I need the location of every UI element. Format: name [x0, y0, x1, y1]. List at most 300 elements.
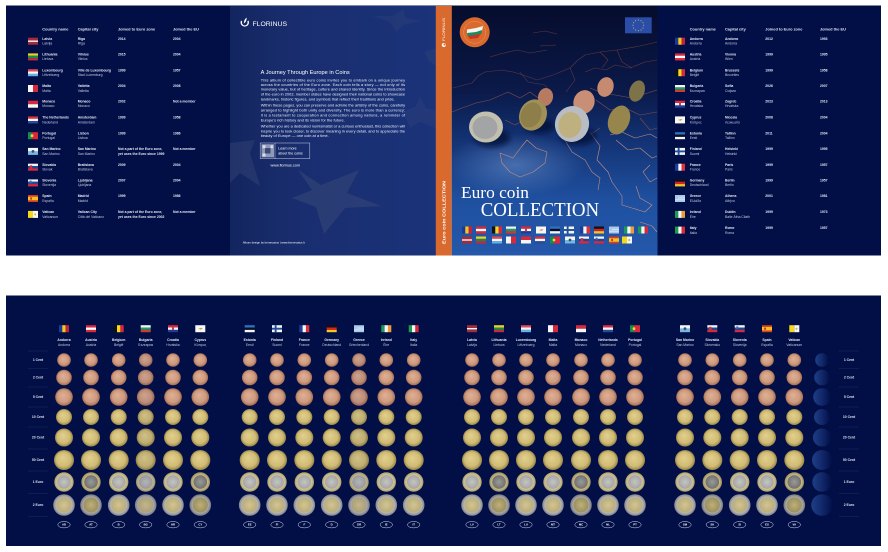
- row: Cyprus: Cyprus: [690, 116, 701, 120]
- row: Malta: [28, 84, 181, 93]
- row: France: Paris: [725, 168, 733, 172]
- row: Croatia: [675, 100, 828, 108]
- column: Italy: [403, 325, 425, 528]
- row: Estonia: Tallinn: [725, 136, 735, 140]
- column: Malta: Malta: [549, 338, 557, 342]
- coin: copper medium: [570, 87, 598, 117]
- row: Ireland: [675, 210, 828, 219]
- QR code box: Learn more: [278, 147, 297, 151]
- row: Cyprus: 2004: [820, 116, 828, 120]
- column: San Marino: SM: [683, 523, 688, 527]
- table header: Country name: [42, 26, 69, 31]
- row: Luxembourg: Luxembourg: [42, 68, 63, 72]
- column: Cyprus: Κύπρος: [194, 343, 207, 347]
- row: Cyprus: Λευκωσία: [725, 120, 740, 124]
- column: Malta: MT: [551, 523, 555, 527]
- row: Italy: Italia: [690, 231, 697, 235]
- row: Slovenia: Slovenia: [42, 178, 56, 182]
- row: Slovenia: Ljubljana: [78, 178, 93, 182]
- row: Cyprus: [675, 116, 828, 124]
- text block: intro paragraphs: This album of collectible euro coins invites you to embark on a unique journey: [261, 78, 405, 82]
- column: Portugal: [624, 325, 646, 528]
- column: Vatican: VA: [792, 523, 796, 527]
- column: Portugal: Portugal: [629, 343, 642, 347]
- column: Germany: D: [331, 523, 333, 527]
- cover glow: [445, 133, 585, 197]
- row: Austria: 1999: [765, 52, 773, 56]
- row: Portugal: 1986: [173, 132, 181, 136]
- column: Estonia: EE: [248, 523, 252, 527]
- row: The Netherlands: The Netherlands: [42, 116, 69, 120]
- row: Andorra: Andorra: [725, 42, 737, 46]
- column: Estonia: Estonia: [244, 338, 256, 342]
- column: Cyprus: Cyprus: [194, 338, 206, 342]
- row: Portugal: Lisbon: [78, 132, 89, 136]
- row: Croatia: Hrvatska: [725, 104, 738, 108]
- column: Malta: [542, 325, 564, 528]
- row: Portugal: Lisboa: [78, 136, 88, 140]
- column: Greece: GR: [357, 523, 361, 527]
- row: Malta: Valletta: [78, 84, 90, 88]
- row: Belgium: België: [690, 73, 699, 77]
- row: The Netherlands: 1999: [118, 116, 126, 120]
- row: Portugal: Portugal: [42, 132, 56, 136]
- spine title: Euro coin COLLECTION: [441, 180, 446, 244]
- column: Portugal: Portugal: [628, 338, 642, 342]
- row: Slovakia: 2009: [118, 163, 126, 167]
- column: Slovakia: Slovensko: [704, 343, 720, 347]
- row: Greece: [675, 194, 828, 203]
- website: www.florinus.com: [271, 163, 300, 167]
- row: Austria: Austria: [690, 52, 701, 56]
- row: Finland: 1995: [820, 147, 828, 151]
- row: Malta: Valletta: [78, 89, 89, 93]
- row: Bulgaria: [675, 84, 828, 93]
- row: Estonia: Eesti: [690, 136, 697, 140]
- QR code box: about the coins: [278, 151, 303, 155]
- row: Ireland: Baile Átha Cliath: [725, 215, 750, 219]
- row: Monaco: [28, 100, 196, 108]
- spine brand: FLORINUS: [442, 17, 446, 41]
- text block: intro paragraphs: Europe's rich history and its vision for the future.: [261, 118, 345, 122]
- column: Croatia: Hrvatska: [166, 343, 180, 347]
- column: Italy: Italia: [410, 343, 417, 347]
- column: Vatican: [784, 325, 805, 528]
- row: Luxembourg: Lëtzebuerg: [42, 73, 59, 77]
- table header: Joined to Euro zone: [118, 26, 156, 31]
- right denomination labels: [839, 351, 859, 516]
- left denomination labels: 10 Cent: [32, 415, 45, 419]
- column: Vatican: Vatican: [788, 338, 800, 342]
- row: Croatia: 2023: [765, 100, 773, 104]
- row: Slovakia: Slovak: [42, 168, 53, 172]
- row: Andorra: [675, 37, 828, 46]
- row: Italy: Italy: [690, 226, 697, 230]
- row: Greece: Αθήνα: [725, 199, 735, 203]
- row: Bulgaria: София: [725, 89, 736, 93]
- column: Germany: Germany: [324, 338, 339, 342]
- row: Italy: Rome: [725, 226, 735, 230]
- row: Lithuania: Vilnius: [78, 52, 89, 56]
- background stars: [230, 9, 436, 234]
- left denomination labels: 1 Euro: [33, 480, 43, 484]
- column: Croatia: HR: [171, 523, 175, 527]
- row: France: 1957: [820, 163, 828, 167]
- row: Cyprus: Κύπρος: [690, 120, 702, 124]
- row: Monaco: 2002: [118, 100, 126, 104]
- column: Finland: FI: [276, 523, 278, 527]
- row: Lithuania: Vilnius: [78, 57, 88, 61]
- row: Greece: Athens: [725, 194, 737, 198]
- ghost coin column: [811, 353, 833, 516]
- row: Luxembourg: [28, 68, 181, 77]
- column: Latvia: Latvia: [467, 338, 477, 342]
- left denomination labels: [28, 351, 48, 516]
- table header: Capital city: [725, 26, 747, 31]
- right denomination labels: 5 Cent: [844, 395, 855, 399]
- row: Lithuania: Lithuania: [42, 52, 57, 56]
- column: France: [294, 325, 315, 528]
- column: Monaco: [570, 325, 592, 528]
- column: Greece: [348, 325, 370, 528]
- row: Lithuania: Lietuva: [42, 57, 53, 61]
- column: Monaco: Monaco: [575, 343, 587, 347]
- row: Belgium: Belgium: [690, 68, 703, 72]
- row: Croatia: 2013: [820, 100, 828, 104]
- column: Lithuania: LT: [497, 523, 501, 527]
- row: Slovakia: [28, 163, 181, 172]
- row: Andorra: 2012: [765, 37, 773, 41]
- row: Vatican: Not a member: [173, 210, 196, 214]
- row: Malta: Malta: [42, 84, 51, 88]
- column: Monaco: Monaco: [575, 338, 587, 342]
- column: Belgium: B: [118, 523, 120, 527]
- row: Bulgaria: Bulgaria: [690, 84, 703, 88]
- row: Germany: Germany: [690, 178, 705, 182]
- row: Latvia: Latvia: [42, 37, 52, 41]
- row: Monaco: Monaco: [78, 100, 91, 104]
- column: Ireland: [376, 325, 397, 528]
- column: Lithuania: Lietuva: [494, 343, 505, 347]
- column: Slovakia: SK: [710, 523, 714, 527]
- row: Malta: 2008: [173, 84, 181, 88]
- row: Germany: [675, 178, 828, 187]
- column: Luxembourg: Lëtzebuerg: [518, 343, 535, 347]
- column: Netherlands: [597, 325, 619, 528]
- column: Ireland: IE: [385, 523, 388, 527]
- column: Malta: Malta: [549, 343, 557, 347]
- left denomination labels: 5 Cent: [33, 395, 44, 399]
- column: Italy: IT: [412, 523, 415, 527]
- column: Slovenia: [729, 325, 750, 528]
- column: Spain: España: [761, 343, 773, 347]
- map lines: [452, 31, 657, 232]
- column: Netherlands: Nederland: [600, 343, 616, 347]
- logo: Florinus: FLORINUS: [252, 21, 287, 28]
- row: Greece: Ελλάδα: [690, 199, 701, 203]
- right denomination labels: 50 Cent: [843, 458, 856, 462]
- row: Monaco: Monaco: [42, 100, 55, 104]
- row: Belgium: Brussels: [725, 68, 739, 72]
- EU flag: [625, 17, 652, 33]
- column: Bulgaria: [135, 325, 156, 528]
- right denomination labels: 2 Cent: [844, 376, 855, 380]
- column: Netherlands: NL: [606, 523, 610, 527]
- right denomination labels: 20 Cent: [843, 436, 856, 440]
- row: Bulgaria: Sofia: [725, 84, 733, 88]
- column: Bulgaria: Bulgaria: [139, 338, 153, 342]
- right denomination labels: 2 Euro: [844, 503, 854, 507]
- row: Spain: 1999: [118, 194, 126, 198]
- row: Estonia: 2004: [820, 132, 828, 136]
- row: Luxembourg: Ville de Luxembourg: [78, 68, 111, 72]
- cover title: [461, 183, 599, 221]
- cover title: COLLECTION: [481, 199, 599, 221]
- heading: A Journey Through Europe in Coins: [261, 70, 350, 76]
- row: Belgium: 1958: [820, 68, 828, 72]
- column: Andorra: Andorra: [58, 343, 70, 347]
- column: Slovenia: Slovenia: [733, 338, 747, 342]
- column: France: F: [303, 523, 305, 527]
- column: San Marino: [674, 325, 696, 528]
- column: Portugal: PT: [633, 523, 637, 527]
- column: Slovakia: [702, 325, 723, 528]
- logo: Florinus: [241, 18, 287, 28]
- row: Finland: Suomi: [690, 152, 700, 156]
- right denomination labels: 10 Cent: [843, 415, 856, 419]
- row: Finland: [675, 147, 828, 156]
- row: Latvia: Rīga: [78, 42, 85, 46]
- row: Slovenia: Slovenija: [42, 183, 56, 187]
- table header: Country name: [690, 26, 717, 31]
- row: France: Paris: [725, 163, 733, 167]
- column: Andorra: AD: [62, 523, 66, 527]
- column: Slovenia: SI: [738, 523, 741, 527]
- row: Vatican: Vatican: [42, 210, 54, 214]
- table header: [42, 26, 199, 31]
- row: Estonia: Tallinn: [725, 132, 736, 136]
- row: Ireland: Ireland: [690, 210, 701, 214]
- row: San Marino: San Marino: [78, 147, 96, 151]
- table header: Joined the EU: [173, 26, 199, 31]
- row: Finland: 1999: [765, 147, 773, 151]
- row: Greece: Greece: [690, 194, 701, 198]
- coin: gold right: [604, 102, 634, 138]
- row: France: France: [690, 168, 700, 172]
- QR code box: [260, 143, 310, 159]
- panel: back cover: [230, 5, 436, 256]
- column: Andorra: Andorra: [57, 338, 71, 342]
- row: Austria: Austria: [690, 57, 700, 61]
- row: Luxembourg: 1999: [118, 68, 126, 72]
- column: Estonia: Eesti: [246, 343, 254, 347]
- column: Slovakia: Slovakia: [705, 338, 719, 342]
- text block: intro paragraphs: across the countries of the Euro zone. Each coin tells a story — not only of its: [261, 83, 405, 87]
- row: Estonia: Estonia: [690, 132, 702, 136]
- row: Ireland: Dublin: [725, 210, 736, 214]
- coin: one euro: [469, 112, 503, 142]
- column: Bulgaria: BG: [144, 523, 148, 527]
- text block: intro paragraphs: landmarks, historic figures, and symbols that reflect their traditions and pride.: [261, 98, 395, 102]
- row: Portugal: Portugal: [42, 136, 55, 140]
- row: Belgium: Bruxelles: [725, 73, 739, 77]
- column: Cyprus: CY: [198, 523, 202, 527]
- row: Latvia: Riga: [78, 37, 85, 41]
- row: Cyprus: Nicosia: [725, 116, 737, 120]
- row: The Netherlands: Amsterdam: [78, 120, 95, 124]
- row: Slovenia: [28, 178, 181, 187]
- column: Latvia: LV: [470, 523, 474, 527]
- row: Luxembourg: 1957: [173, 68, 181, 72]
- row: Portugal: [28, 132, 181, 140]
- row: San Marino: San Marino: [78, 152, 95, 156]
- row: San Marino: Not a part of the Euro zone,: [118, 147, 162, 151]
- row: Belgium: 1999: [765, 68, 773, 72]
- row: Malta: Malta: [42, 89, 51, 93]
- row: San Marino: San Marino: [42, 147, 61, 151]
- row: Latvia: 2014: [118, 37, 126, 41]
- right denomination labels: 1 Cent: [844, 358, 855, 362]
- row: Austria: [675, 52, 828, 61]
- column: Ireland: Éire: [383, 342, 389, 347]
- cover title: Euro coin: [461, 183, 529, 202]
- column: Finland: [266, 325, 288, 528]
- column: Germany: Deutschland: [322, 343, 341, 347]
- row: Slovakia: Bratislava: [78, 163, 94, 167]
- row: Latvia: Latvija: [42, 42, 52, 46]
- table header: Capital city: [78, 26, 99, 31]
- column: Andorra: [53, 325, 75, 528]
- row: Ireland: 1973: [820, 210, 828, 214]
- coin: copper far: [595, 75, 616, 99]
- row: Portugal: 1999: [118, 132, 126, 136]
- row: France: [675, 163, 828, 172]
- text block: intro paragraphs: beauty of Europe — one coin at a time.: [261, 134, 329, 138]
- column: Belgium: [108, 325, 130, 528]
- table header: [690, 26, 846, 31]
- row: Estonia: 2011: [765, 132, 773, 136]
- coins on cover: [469, 75, 648, 147]
- right denomination labels: 1 Euro: [844, 480, 854, 484]
- column: Lithuania: [488, 325, 510, 528]
- panel: right country table: [658, 5, 881, 256]
- left denomination labels: 1 Cent: [33, 358, 44, 362]
- column: Slovenia: Slovenija: [733, 343, 747, 347]
- column: Ireland: Ireland: [381, 338, 392, 342]
- row: Cyprus: 2008: [765, 116, 773, 120]
- coin: two euro: [551, 102, 593, 146]
- cover flags: [462, 226, 648, 244]
- row: Slovakia: Bratislava: [78, 168, 93, 172]
- row: Vatican: Città del Vaticano: [78, 215, 104, 219]
- text block: intro paragraphs: of the euro in 2002, member states have designed their national coins to showcase: [261, 93, 405, 97]
- row: Ireland: 1999: [765, 210, 773, 214]
- row: The Netherlands: Amsterdam: [78, 116, 96, 120]
- row: Slovenia: 2004: [173, 178, 181, 182]
- row: Malta: 2004: [118, 84, 126, 88]
- column: Austria: [80, 325, 102, 528]
- text block: intro paragraphs: Within these pages, you can preserve and admire the artistry of the coins, carefully: [261, 103, 405, 107]
- text block: intro paragraphs: it is a testament to cooperation and connection among nations, a reminder of: [261, 113, 406, 117]
- row: Bulgaria: 2026: [765, 84, 773, 88]
- row: Germany: Berlin: [725, 183, 734, 187]
- credit: Album design by brmercatus | www.brmercatus.lt: [243, 240, 305, 244]
- column: Spain: Spain: [762, 338, 772, 342]
- row: Lithuania: 2004: [173, 52, 181, 56]
- text block: intro paragraphs: inspire you to look closer, to discover meaning in every detail, and to appreciate the: [261, 129, 405, 133]
- column: San Marino: San Marino: [676, 338, 694, 342]
- row: Germany: 1957: [820, 178, 828, 182]
- row: Spain: [28, 194, 181, 203]
- row: The Netherlands: Nederland: [42, 120, 58, 124]
- row: Monaco: Monaco: [78, 104, 90, 108]
- column: Austria: Austria: [86, 343, 96, 347]
- panel: left country table: [6, 5, 658, 256]
- column: Luxembourg: Luxembourg: [516, 338, 536, 342]
- row: Finland: Helsinki: [725, 147, 738, 151]
- column: Finland: Finland: [271, 338, 283, 342]
- row: Italy: [675, 226, 828, 235]
- column: Croatia: [162, 325, 184, 528]
- row: Lithuania: 2015: [118, 52, 126, 56]
- table header: Joined to Euro zone: [765, 26, 803, 31]
- column: Austria: AT: [89, 523, 93, 527]
- panel: spine: [436, 5, 452, 256]
- row: Finland: Finland: [690, 147, 702, 151]
- column: Belgium: Belgium: [112, 338, 125, 342]
- column: Finland: Suomi: [272, 343, 282, 347]
- row: Slovenia: Ljubljana: [78, 183, 91, 187]
- row: Ireland: Éire: [690, 214, 696, 219]
- column: Germany: [321, 325, 343, 528]
- row: Croatia: Zagreb: [725, 100, 736, 104]
- column: Austria: Austria: [85, 338, 97, 342]
- row: Slovenia: 2007: [118, 178, 126, 182]
- coin: copper small: [536, 87, 555, 107]
- row: France: France: [690, 163, 701, 167]
- text block: intro paragraphs: arranged to highlight both unity and diversity. The euro is more than a currency:: [261, 108, 405, 112]
- row: Finland: Helsinki: [725, 152, 737, 156]
- row: Andorra: Andorra: [725, 37, 738, 41]
- column: France: France: [299, 343, 310, 347]
- text block: intro paragraphs: monetary value, but of heritage, culture and shared identity. Since the introduction: [261, 88, 405, 92]
- column: Spain: [756, 325, 778, 528]
- row: Andorra: Andorra: [690, 42, 702, 46]
- row: Latvia: [28, 37, 181, 46]
- left denomination labels: 50 Cent: [32, 458, 45, 462]
- row: San Marino: [28, 147, 196, 156]
- row: San Marino: Not a member: [173, 147, 196, 151]
- left denomination labels: 2 Euro: [33, 503, 43, 507]
- column: Latvia: Latvija: [467, 343, 477, 347]
- row: Vatican: Vaticanum: [42, 215, 58, 219]
- left denomination labels: 20 Cent: [32, 436, 45, 440]
- column: Estonia: [239, 325, 260, 528]
- column: Vatican: Vaticanum: [786, 343, 802, 347]
- column: Greece: Greece: [353, 338, 365, 342]
- text block: intro paragraphs: Whether you are a dedicated numismatist or a curious enthusiast, this collection will: [261, 124, 405, 128]
- row: San Marino: San Marino: [42, 152, 60, 156]
- column: Latvia: [461, 325, 483, 528]
- column: Luxembourg: [515, 325, 537, 528]
- panel: front cover: [445, 5, 658, 256]
- spine logo: [442, 43, 446, 47]
- row: Vatican: [28, 210, 196, 219]
- coin: gold front: [514, 95, 552, 135]
- row: Greece: 1981: [820, 194, 828, 198]
- row: Vatican: Vatican City: [78, 210, 97, 214]
- row: Lithuania: [28, 52, 181, 61]
